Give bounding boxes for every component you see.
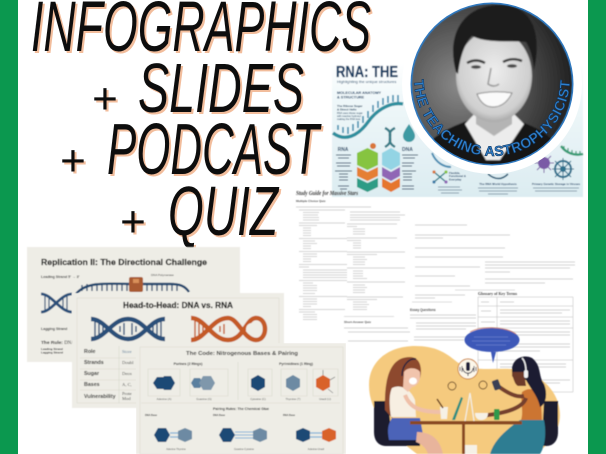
skirt bbox=[388, 418, 424, 440]
comparison table: Deox bbox=[122, 371, 133, 376]
viruses text: Primary Genetic Storage in Viruses bbox=[532, 182, 581, 186]
RNA world text: The RNA World Hypothesis bbox=[479, 182, 517, 186]
DNA stack bbox=[382, 148, 400, 192]
pair: A-U bbox=[283, 414, 336, 451]
short answer quiz heading bbox=[344, 320, 410, 341]
pair: G-C: Guanine-Cytosine bbox=[234, 448, 255, 451]
pair: A-U: Adenine-Uracil bbox=[308, 448, 325, 451]
polymerase icon bbox=[129, 277, 143, 292]
base: guanine bbox=[191, 376, 215, 401]
hair bbox=[385, 357, 421, 418]
ribose callout: with reactive hydroxyl bbox=[337, 115, 361, 118]
pair: A-T: Adenine-Thymine bbox=[166, 448, 186, 451]
bowl bbox=[475, 413, 488, 420]
headline line: podcast bbox=[60, 110, 324, 192]
headline line: podcast: PODCAST bbox=[107, 110, 322, 190]
base: cytosine: Cytosine (C) bbox=[250, 397, 266, 401]
speech bubble bbox=[464, 328, 520, 363]
base: guanine: Guanine (G) bbox=[196, 397, 212, 401]
comparison table: Role bbox=[84, 349, 96, 355]
RNA world text bbox=[478, 174, 518, 194]
RNA helix bbox=[191, 318, 265, 340]
document divider lines bbox=[344, 290, 515, 316]
comparison table: Sugar bbox=[84, 371, 99, 377]
study guide document bbox=[296, 190, 575, 392]
comparison table: Vulnerability bbox=[84, 394, 116, 400]
divider boxes bbox=[148, 363, 338, 399]
headline line: slides: SLIDES bbox=[140, 51, 306, 129]
right person bbox=[480, 357, 546, 454]
podcast illustration bbox=[369, 328, 560, 454]
headline line: quiz: + bbox=[122, 200, 148, 248]
lagging label: Lagging Strand bbox=[41, 327, 67, 331]
green strand right bbox=[561, 146, 583, 155]
base: thymine bbox=[285, 375, 301, 401]
hair bbox=[512, 357, 546, 407]
comparison table: Strands bbox=[84, 360, 104, 366]
RNA strand bbox=[333, 95, 403, 137]
headline line: slides: + bbox=[94, 76, 120, 126]
slide: replication bbox=[27, 247, 240, 362]
ribose callout: & Direct Helix bbox=[337, 107, 357, 111]
versatility icon bbox=[432, 170, 466, 193]
replication fork bbox=[76, 284, 189, 294]
slide 1 title: Replication II: The Directional Challenge bbox=[41, 257, 207, 267]
quiz column one bbox=[296, 207, 371, 320]
slide 3 title: The Code: Nitrogenous Bases & Pairing bbox=[186, 351, 299, 357]
base: uracil bbox=[316, 370, 335, 401]
legs bbox=[416, 432, 443, 454]
face bbox=[403, 368, 420, 392]
quiz column two bbox=[347, 212, 405, 310]
slide: head-to-head bbox=[72, 293, 284, 408]
microphone badge bbox=[458, 359, 478, 379]
comparison table: Bases bbox=[84, 382, 100, 388]
headline line: quiz bbox=[120, 172, 281, 252]
rule sublines: Leading Strand bbox=[41, 347, 63, 351]
pants bbox=[490, 420, 545, 454]
right chair bbox=[516, 401, 558, 446]
polymerase label: DNA Polymerase bbox=[151, 273, 174, 277]
DNA column bbox=[382, 147, 418, 192]
DNA helix bbox=[91, 319, 165, 339]
comparison table bbox=[80, 346, 136, 403]
arm with phone bbox=[480, 386, 526, 416]
RNA column bbox=[335, 143, 378, 192]
purines heading: Purines (2 Rings) bbox=[174, 362, 202, 366]
pair: G-C bbox=[213, 414, 267, 451]
top bbox=[390, 386, 416, 417]
headphones bbox=[522, 358, 526, 372]
base: uracil: Uracil (U) bbox=[319, 397, 331, 401]
small icon: check bbox=[448, 382, 456, 390]
essay questions bbox=[410, 308, 476, 340]
left person bbox=[385, 357, 443, 454]
pairing heading: Pairing Rules: The Chemical Glue bbox=[213, 407, 269, 411]
study guide title: Study Guide for Massive Stars bbox=[296, 190, 358, 197]
arm bbox=[405, 395, 442, 412]
portrait photo bbox=[412, 4, 572, 172]
comparison table: Store bbox=[122, 349, 132, 354]
short answer column bbox=[415, 225, 510, 298]
base: adenine: Adenine (A) bbox=[157, 397, 171, 401]
headphones bbox=[402, 359, 416, 376]
ribose callout: making the RNA less bbox=[337, 118, 361, 121]
viruses text bbox=[532, 182, 581, 191]
headline line: podcast: + bbox=[60, 136, 86, 186]
headline line: quiz: QUIZ bbox=[170, 174, 281, 252]
green border: right bbox=[588, 0, 606, 454]
table bbox=[410, 421, 522, 454]
white bag bbox=[465, 445, 477, 454]
comparison table: Doubl bbox=[122, 360, 134, 365]
rule text: The Rule: DNA bbox=[41, 340, 75, 346]
comparison table: Prote bbox=[122, 391, 132, 396]
base: thymine: Thymine (T) bbox=[285, 397, 301, 401]
microphone stand bbox=[465, 393, 474, 421]
versatility icon: Flexible, bbox=[449, 171, 460, 175]
pair: A-U: RNA Base bbox=[283, 414, 296, 417]
badge circular text: THE TEACHING ASTROPHYSICIST bbox=[414, 79, 570, 156]
ribose callout: The Ribose Sugar bbox=[337, 104, 363, 108]
short answer quiz heading: Short-Answer Quiz bbox=[344, 320, 372, 324]
poster section heading: & STRUCTURE bbox=[337, 96, 365, 100]
headline bbox=[31, 0, 373, 252]
essay questions: Essay Questions bbox=[410, 308, 436, 312]
glossary table bbox=[478, 291, 573, 392]
virus icons bbox=[534, 153, 574, 180]
headline line: infographics bbox=[31, 0, 373, 69]
leading strand label: Leading Strand 5' → 3' bbox=[41, 275, 80, 279]
cup bbox=[440, 407, 448, 419]
headline line: quiz: + bbox=[120, 198, 146, 246]
pyrimidines heading: Pyrimidines (1 Ring) bbox=[279, 362, 313, 366]
small icon: gear bbox=[479, 381, 487, 389]
headline line: slides: + bbox=[92, 74, 118, 124]
top bbox=[521, 389, 542, 420]
left chair bbox=[374, 401, 420, 446]
base: cytosine bbox=[250, 375, 266, 401]
key concept paragraph bbox=[485, 262, 575, 283]
DNA helix icon bbox=[385, 128, 395, 147]
green bottle bbox=[494, 409, 500, 420]
DNA column: DNA bbox=[402, 147, 413, 153]
RNA stack bbox=[357, 143, 378, 192]
base: adenine bbox=[153, 376, 175, 401]
face bbox=[512, 372, 526, 386]
headline line: slides bbox=[92, 49, 306, 129]
versatility icon: Everyday bbox=[449, 177, 462, 181]
headline line: slides: SLIDES bbox=[138, 49, 304, 127]
pencil bbox=[437, 399, 443, 408]
multiple choice heading: Multiple Choice Quiz bbox=[296, 199, 326, 203]
glossary table: Glossary of Key Terms bbox=[478, 291, 517, 296]
versatility icon: Functional & bbox=[449, 174, 466, 178]
pair: G-C: DNA Base bbox=[213, 414, 226, 417]
profile badge: The Teaching Astrophysicist bbox=[402, 2, 582, 174]
comparison table: Mod bbox=[122, 396, 131, 401]
comparison table: A, C, bbox=[122, 382, 132, 388]
slide 2 title: Head-to-Head: DNA vs. RNA bbox=[123, 300, 233, 310]
pair: A-T bbox=[145, 414, 192, 451]
curved ribbon bbox=[432, 153, 451, 167]
RNA poster bbox=[332, 62, 583, 197]
yellow blob background bbox=[369, 346, 560, 454]
headline line: podcast: + bbox=[62, 138, 88, 188]
mask bbox=[409, 378, 417, 384]
ribose callout: RNA uses ribose sugar bbox=[337, 112, 363, 115]
pair: A-T: DNA Base bbox=[145, 414, 158, 417]
slide: nitrogenous bases bbox=[136, 343, 346, 454]
green border: left bbox=[0, 0, 18, 454]
headline line: podcast: PODCAST bbox=[109, 112, 324, 192]
poster subtitle: Highlighting the unique structures bbox=[337, 79, 396, 84]
tablet bbox=[452, 397, 463, 420]
left helix bbox=[41, 294, 72, 312]
RNA column: RNA bbox=[338, 147, 349, 153]
poster title: RNA: THE bbox=[336, 64, 398, 81]
rule sublines: Lagging Strand bbox=[41, 350, 63, 354]
headline line: quiz: QUIZ bbox=[168, 172, 279, 250]
water drop icon bbox=[403, 124, 415, 142]
poster section heading: MOLECULAR ANATOMY bbox=[337, 91, 381, 95]
